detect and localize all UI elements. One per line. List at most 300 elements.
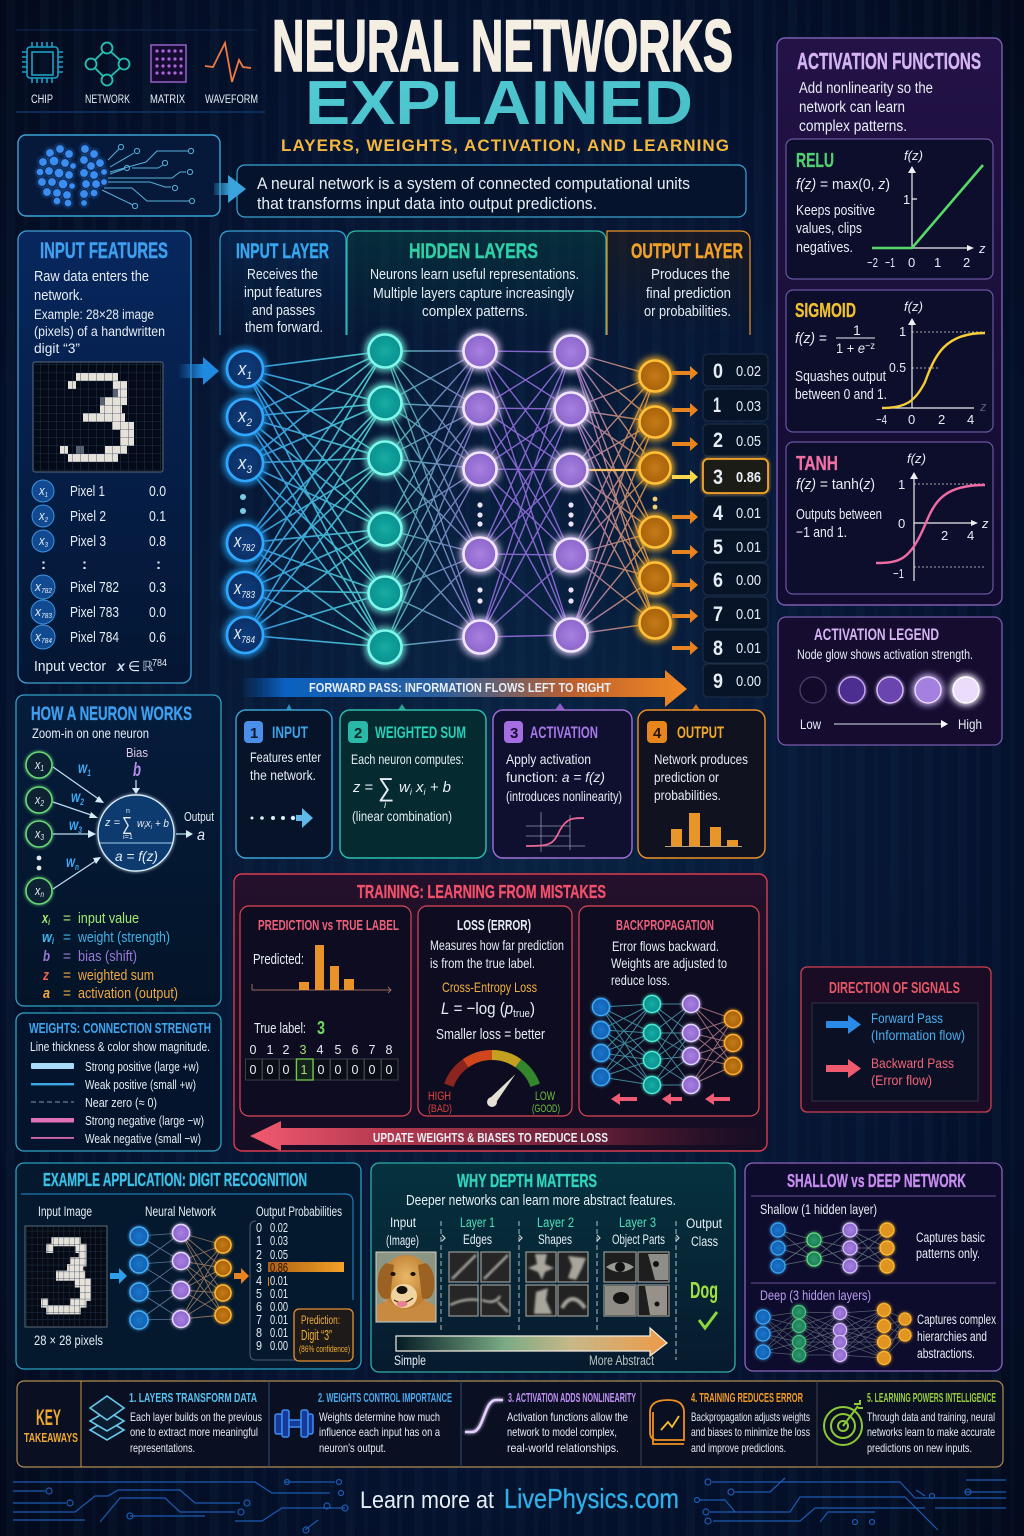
one-hot label: 0 <box>369 1063 376 1077</box>
icon label: chip: CHIP <box>31 94 53 106</box>
digit 3 image <box>33 362 163 472</box>
feature tiles: object parts <box>604 1252 669 1316</box>
column labels: Layer 2 <box>537 1215 574 1230</box>
card: step 2 weighted sum: WEIGHTED SUM <box>375 723 466 742</box>
arrow: backward <box>826 1059 861 1078</box>
card: step 4 output: probabilities. <box>654 787 721 803</box>
neuron legend: x <box>42 910 50 927</box>
takeaway 1 <box>90 1390 262 1455</box>
arrow: forward pass: FORWARD PASS: INFORMATION FLOWS LEFT TO RIGHT <box>309 681 611 695</box>
pixel value table: 784 <box>41 638 52 645</box>
card: step 2 weighted sum: (linear combination) <box>352 808 452 824</box>
icon: network <box>86 42 130 86</box>
takeaway 4: Backpropagation adjusts weights <box>691 1410 810 1424</box>
pixel value table: Pixel 782 <box>70 579 119 596</box>
icon: chip <box>22 42 63 83</box>
panel: activation legend: ACTIVATION LEGEND <box>814 626 939 644</box>
sub-panel: prediction vs true label: True label: <box>254 1021 306 1037</box>
output probability list: 0.02 <box>270 1220 288 1235</box>
arrow: features to network <box>178 357 219 385</box>
chart: sigmoid: 1 <box>899 324 906 339</box>
input nodes: 782 <box>241 543 255 554</box>
shallow network <box>760 1201 985 1273</box>
input nodes: 3 <box>246 464 253 476</box>
deep network <box>756 1287 996 1364</box>
icon: dotted arrow <box>250 808 313 828</box>
input nodes: x <box>234 623 243 643</box>
circuit traces left <box>13 1480 348 1533</box>
takeaway 3 <box>465 1390 636 1455</box>
neuron diagram: 2 <box>40 799 44 808</box>
icon: matrix <box>151 45 186 82</box>
arrow: network to output <box>234 1268 249 1284</box>
output probability table: 2 <box>713 429 723 452</box>
output probability list: 2 <box>256 1247 262 1262</box>
sub-panel: loss <box>418 906 572 1116</box>
mini network <box>130 1224 231 1329</box>
sub-panel: loss: is from the true label. <box>430 955 535 971</box>
takeaway 2 <box>275 1390 452 1455</box>
card: sigmoid: 1 + e <box>836 340 866 356</box>
call to action: LivePhysics.com <box>504 1483 679 1514</box>
chart: sigmoid: 4 <box>967 412 974 427</box>
panel: input features <box>18 231 191 683</box>
neuron diagram: + b <box>152 818 169 830</box>
sub-panel: backpropagation <box>579 906 759 1116</box>
panel: direction of signals: Forward Pass <box>871 1010 943 1026</box>
feature tiles: edges <box>449 1252 510 1316</box>
key label <box>24 1405 78 1445</box>
output probability table: 5 <box>713 536 723 559</box>
weight line legend: Weak negative (small −w) <box>85 1131 201 1146</box>
card: tanh: Outputs between <box>796 507 882 523</box>
card: step 4 output <box>638 704 765 858</box>
column labels: (Image) <box>386 1233 419 1248</box>
description <box>34 269 165 356</box>
card: sigmoid: Squashes output <box>795 369 886 385</box>
panel: weights connection strength <box>16 1013 221 1151</box>
neuron legend: b <box>43 948 50 965</box>
sub-panel: prediction vs true label <box>240 906 411 1116</box>
mini network <box>592 996 742 1094</box>
icon label: waveform: WAVEFORM <box>205 94 258 106</box>
neuron diagram: x <box>35 792 42 807</box>
card: relu: values, clips <box>796 221 862 237</box>
panel: weights connection strength: Line thickness & color show magnitude. <box>30 1039 210 1054</box>
description: network. <box>34 288 83 304</box>
neuron legend: = <box>63 985 71 1002</box>
key label: TAKEAWAYS <box>24 1430 78 1445</box>
pixel value table: : <box>82 556 87 573</box>
heading: EXAMPLE APPLICATION: DIGIT RECOGNITION <box>43 1170 307 1190</box>
chart: relu: −2 <box>867 255 878 270</box>
sub-panel: loss: LOSS (ERROR) <box>457 918 531 934</box>
card: step 3 activation: (introduces nonlinearity) <box>506 789 622 804</box>
panel: hidden layers header: Neurons learn useful representations. <box>370 267 579 283</box>
neuron diagram: x <box>35 826 42 841</box>
panel: example application <box>16 1163 361 1369</box>
panel: input layer header: INPUT LAYER <box>236 240 329 263</box>
output probability list: 0.00 <box>270 1299 288 1314</box>
title <box>272 6 733 155</box>
neuron legend <box>41 910 178 1002</box>
chart: tanh <box>876 451 989 581</box>
gauge <box>449 1055 535 1107</box>
connections: hidden 2 to hidden 3 <box>480 351 571 637</box>
weight line legend: Strong positive (large +w) <box>85 1059 199 1074</box>
sub-panel: prediction vs true label: PREDICTION vs TRUE LABEL <box>258 918 399 934</box>
one-hot label: 0 <box>352 1063 359 1077</box>
neuron legend: weight (strength) <box>77 929 170 946</box>
card: step 2 weighted sum: i <box>384 800 387 811</box>
output probability table: 8 <box>713 637 723 660</box>
output probability table: 0.05 <box>736 433 761 450</box>
loss formula: ) <box>530 999 535 1018</box>
definition callout: that transforms input data into output predictions. <box>257 195 597 213</box>
neuron legend: activation (output) <box>78 985 178 1002</box>
neuron diagram: Output <box>184 810 214 824</box>
output probability table: 0 <box>713 360 723 383</box>
icon label: network: NETWORK <box>85 94 130 106</box>
input vector label: ℝ <box>142 659 154 675</box>
sub-panel: prediction vs true label: Predicted: <box>253 952 304 968</box>
pixel value table: 783 <box>41 613 52 620</box>
icon: target <box>824 1400 863 1445</box>
panel: hidden layers header: complex patterns. <box>422 304 528 320</box>
panel: direction of signals <box>801 967 991 1112</box>
pixel value table: x <box>35 629 42 644</box>
weight line legend <box>31 1059 204 1146</box>
output probability list: 8 <box>256 1325 262 1340</box>
description: (pixels) of a handwritten <box>34 324 165 339</box>
panel: input layer header: Receives the <box>247 267 318 283</box>
output probability list: 0 <box>256 1220 262 1235</box>
pixel value table: Pixel 783 <box>70 604 119 621</box>
one-hot label: 0 <box>335 1063 342 1077</box>
card: step 1 input: INPUT <box>272 723 308 742</box>
chart: sigmoid: z <box>979 399 987 414</box>
chart: relu: f(z) <box>904 148 923 163</box>
pixel value table: x <box>39 508 46 523</box>
panel: example application: 28 × 28 pixels <box>34 1333 103 1348</box>
heading: INPUT FEATURES <box>40 238 168 263</box>
card: sigmoid: 1 <box>853 322 861 338</box>
panel: direction of signals: (Information flow) <box>871 1027 965 1043</box>
panel: direction of signals: DIRECTION OF SIGNALS <box>829 980 960 997</box>
takeaway 5 <box>824 1390 996 1455</box>
neuron diagram: Bias <box>126 745 148 760</box>
neural network diagram <box>227 334 698 664</box>
card: relu <box>786 139 993 279</box>
card: tanh: f(z) = tanh(z) <box>796 476 875 493</box>
chart: sigmoid: f(z) <box>904 299 923 314</box>
card: sigmoid <box>786 290 993 432</box>
digit image <box>25 1226 107 1327</box>
heading: HOW A NEURON WORKS <box>31 704 192 725</box>
panel: how a neuron works: Zoom-in on one neuron <box>32 725 149 741</box>
loss formula: true <box>513 1008 530 1020</box>
card: step 1 input: Features enter <box>250 749 321 765</box>
panel: how a neuron works <box>16 695 221 1006</box>
neuron legend: input value <box>78 910 139 927</box>
description: Raw data enters the <box>34 269 149 285</box>
panel: example application: Output Probabilities <box>256 1204 342 1219</box>
output probability list: 6 <box>256 1299 262 1314</box>
chart: relu: 1 <box>934 255 941 270</box>
card: step 2 weighted sum: i <box>410 787 413 797</box>
description: digit “3” <box>34 341 80 356</box>
neuron diagram: 3 <box>40 833 44 842</box>
card: sigmoid: f(z) = <box>795 330 827 347</box>
sub-panel: prediction vs true label: 3 <box>317 1018 325 1038</box>
pixel value table: 0.0 <box>149 483 166 500</box>
heading: WEIGHTS: CONNECTION STRENGTH <box>29 1020 211 1037</box>
back-flow arrows <box>611 1093 730 1105</box>
output probability list: 0.01 <box>270 1325 288 1340</box>
output probability table: 0.86 <box>736 469 761 486</box>
input nodes: 783 <box>241 590 255 601</box>
weight line legend: Strong negative (large −w) <box>85 1113 204 1128</box>
one-hot label: 0 <box>283 1063 290 1077</box>
neuron diagram: a = f(z) <box>115 848 158 864</box>
neuron legend: z <box>42 967 49 984</box>
hidden layer 2 nodes <box>464 334 496 654</box>
output probability table <box>703 354 768 697</box>
output probability list: 0.01 <box>270 1312 288 1327</box>
icon: brain <box>36 144 108 207</box>
card: step 3 activation: 3 <box>510 725 518 742</box>
output probability table: 0.01 <box>736 640 761 657</box>
one-hot label: 3 <box>300 1043 307 1057</box>
card: step 3 activation <box>493 703 632 858</box>
neuron legend: = <box>63 967 71 984</box>
arrow: brain to definition <box>214 175 246 203</box>
neuron diagram: 1 <box>87 768 91 778</box>
takeaway 2: neuron's output. <box>319 1441 386 1455</box>
output probability table: 4 <box>713 502 723 525</box>
icon strip <box>16 30 265 112</box>
card: step 3 activation: function: a = f(z) <box>506 769 605 785</box>
pixel value table: Pixel 1 <box>70 483 105 500</box>
card: step 2 weighted sum: z = <box>352 779 373 796</box>
neuron diagram: a <box>197 827 205 844</box>
panel: input layer header: input features <box>244 285 322 301</box>
sub-panel: backpropagation: Weights are adjusted to <box>611 955 727 971</box>
panel: activation functions <box>777 38 1002 605</box>
input nodes: x <box>234 531 243 551</box>
pixel value table: 0.1 <box>149 508 166 525</box>
takeaway 3: 3. ACTIVATION ADDS NONLINEARITY <box>508 1390 636 1405</box>
card: step 4 output: Network produces <box>654 751 748 767</box>
card: step 2 weighted sum: Each neuron computes: <box>351 751 464 767</box>
output probability table: 6 <box>713 569 723 592</box>
output probability list: 0.01 <box>270 1286 288 1301</box>
takeaway 2: influence each input has on a <box>319 1425 440 1439</box>
output probability table: 0.01 <box>736 539 761 556</box>
pixel value table: 0.3 <box>149 579 166 596</box>
neuron legend: = <box>63 929 71 946</box>
card: relu: negatives. <box>796 240 853 256</box>
deep network: hierarchies and <box>917 1329 987 1344</box>
card: step 3 activation: ACTIVATION <box>530 723 598 742</box>
sub-panel: loss: HIGH <box>428 1089 451 1103</box>
neuron diagram: i=1 <box>123 834 133 841</box>
definition callout: A neural network is a system of connected computational units <box>257 175 690 193</box>
circuit traces right <box>694 1478 1006 1530</box>
neuron diagram: b <box>133 760 141 781</box>
heading: WHY DEPTH MATTERS <box>457 1171 597 1191</box>
column labels: Layer 3 <box>619 1215 656 1230</box>
card: step 1 input <box>236 704 332 858</box>
description: Example: 28×28 image <box>34 307 154 322</box>
one-hot label: 0 <box>250 1043 257 1057</box>
card: sigmoid: SIGMOID <box>795 300 856 322</box>
chart: sigmoid: 0 <box>908 412 915 427</box>
chart: sigmoid: 2 <box>938 412 945 427</box>
one-hot label: 5 <box>335 1043 342 1057</box>
icon label: matrix: MATRIX <box>150 94 185 106</box>
neuron diagram: z = <box>104 817 121 829</box>
pixel value table: Pixel 784 <box>70 629 119 646</box>
neuron legend: a <box>43 985 50 1002</box>
takeaway 3: network to model complex, <box>507 1425 617 1439</box>
card: tanh <box>786 442 993 594</box>
chart: tanh: z <box>981 516 989 531</box>
sub-panel: loss: (GOOD) <box>532 1103 560 1115</box>
output layer nodes <box>640 360 670 638</box>
pixel value table: 782 <box>41 588 52 595</box>
output probability list: 4 <box>256 1273 262 1288</box>
footer <box>13 1478 1006 1533</box>
column labels <box>386 1215 722 1249</box>
predicted bars <box>252 945 391 993</box>
hidden layer 3 nodes <box>554 336 588 652</box>
one-hot label: 6 <box>352 1043 359 1057</box>
chart: relu: z <box>978 241 986 256</box>
one-hot label: 0 <box>250 1063 257 1077</box>
input nodes <box>227 351 263 653</box>
panel: input layer header: and passes <box>252 303 315 319</box>
input nodes: x <box>238 406 247 426</box>
card: step 2 weighted sum: ∑ <box>378 772 394 802</box>
panel: output layer header: Produces the <box>651 267 730 283</box>
panel: activation functions: complex patterns. <box>799 118 907 135</box>
neuron diagram: x <box>35 757 42 772</box>
prediction callout: (86% confidence) <box>299 1344 350 1354</box>
arrow: update weights: UPDATE WEIGHTS & BIASES TO REDUCE LOSS <box>373 1131 608 1145</box>
panel: activation functions: network can learn <box>799 99 905 116</box>
sub-panel: loss: Cross-Entropy Loss <box>442 979 537 995</box>
output probability list: 0.03 <box>270 1233 288 1248</box>
panel: example application: Neural Network <box>145 1204 216 1219</box>
circuit traces <box>102 144 195 209</box>
pixel value table: Pixel 3 <box>70 533 106 550</box>
output probability list <box>250 1220 344 1360</box>
card: tanh: −1 and 1. <box>796 525 847 541</box>
pixel value table: 0.6 <box>149 629 166 646</box>
pixel value table: 1 <box>45 492 48 499</box>
key label: KEY <box>36 1405 61 1430</box>
one-hot label: 0 <box>318 1063 325 1077</box>
chart: relu: 1 <box>903 192 910 207</box>
output probability table: 0.03 <box>736 398 761 415</box>
chart: tanh: 4 <box>967 528 974 543</box>
connections: hidden 3 to output <box>571 352 655 635</box>
connections: hidden 1 to hidden 2 <box>385 351 480 647</box>
neuron legend: = <box>63 910 71 927</box>
title: EXPLAINED <box>305 69 693 138</box>
neuron diagram: n <box>126 808 130 815</box>
shallow network: patterns only. <box>916 1246 980 1261</box>
output probability list: 0.05 <box>270 1247 288 1262</box>
card: step 4 output: 4 <box>653 725 662 742</box>
card: step 1 input: 1 <box>250 725 258 742</box>
card: step 2 weighted sum: w <box>399 779 410 796</box>
icon: book with chart <box>650 1400 684 1444</box>
neuron legend: w <box>42 929 54 946</box>
output probability table: 3 <box>713 466 723 489</box>
prediction callout: Prediction: <box>301 1315 340 1327</box>
card: tanh: TANH <box>796 453 838 475</box>
takeaway 1: Each layer builds on the previous <box>130 1410 262 1424</box>
pixel value table: x <box>35 604 42 619</box>
sub-panel: loss: (BAD) <box>428 1103 452 1115</box>
chart: relu: 2 <box>963 255 970 270</box>
card: relu: RELU <box>796 150 834 172</box>
sub-panel: loss: LOW <box>535 1089 555 1103</box>
one-hot label: 1 <box>301 1063 308 1077</box>
card: sigmoid: between 0 and 1. <box>795 387 887 403</box>
panel: activation functions: Add nonlinearity so the <box>799 80 933 97</box>
prediction callout <box>294 1309 353 1361</box>
pixel value table: x <box>39 533 46 548</box>
panel: direction of signals: (Error flow) <box>871 1072 932 1088</box>
column labels: Edges <box>463 1232 492 1247</box>
feature tiles: shapes <box>526 1252 588 1316</box>
pixel value table: x <box>35 579 42 594</box>
input nodes: x <box>234 578 243 598</box>
input vector label: x <box>116 658 126 674</box>
chart: sigmoid: 0.5 <box>889 360 906 375</box>
deep network: Deep (3 hidden layers) <box>760 1287 871 1303</box>
output probability table: 9 <box>713 670 723 693</box>
takeaway 2: Weights determine how much <box>319 1410 440 1424</box>
neuron diagram <box>26 745 214 904</box>
chart: relu: −1 <box>885 255 895 270</box>
chart: relu <box>867 148 986 270</box>
output probability list: 0.00 <box>270 1338 288 1353</box>
takeaway 5: predictions on new inputs. <box>867 1441 972 1455</box>
deep network: Captures complex <box>917 1312 996 1327</box>
glow scale <box>800 677 979 703</box>
column labels: Object Parts <box>612 1232 665 1247</box>
shallow network: Captures basic <box>916 1230 985 1245</box>
neuron diagram: 2 <box>80 797 84 807</box>
column labels: Layer 1 <box>460 1215 495 1230</box>
panel: activation legend <box>778 617 1002 745</box>
one-hot label: 1 <box>267 1043 274 1057</box>
panel: hidden layers header <box>347 231 606 335</box>
sub-panel: backpropagation: Error flows backward. <box>612 938 719 954</box>
output probability list: 7 <box>256 1312 262 1327</box>
deep network: abstractions. <box>917 1346 975 1361</box>
column labels: Class <box>691 1234 718 1249</box>
neuron diagram: 1 <box>40 764 44 773</box>
neuron legend: = <box>63 948 71 965</box>
output probability list: 0.86 <box>270 1260 288 1275</box>
panel: activation legend: High <box>958 716 982 732</box>
chart: tanh: 1 <box>898 477 905 492</box>
